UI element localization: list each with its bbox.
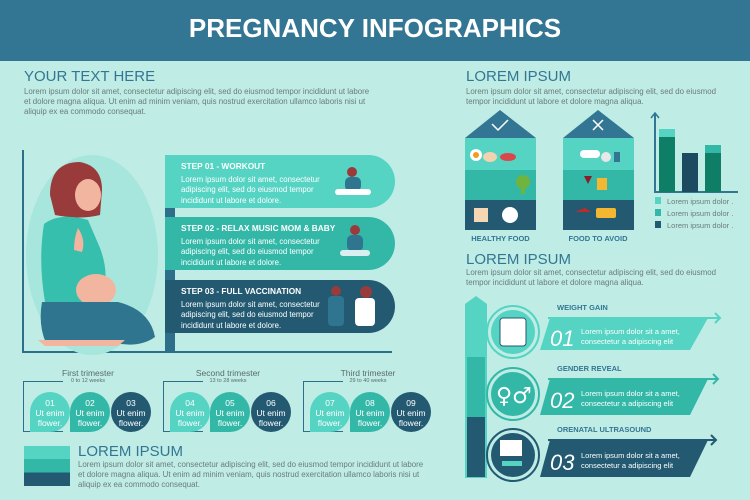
illustration: pregnant woman frame xyxy=(22,150,392,355)
trimester 3: flower. xyxy=(399,418,423,428)
trimester 2: flower. xyxy=(178,418,202,428)
trimester 2: flower. xyxy=(218,418,242,428)
header bar xyxy=(0,0,750,61)
bar chart xyxy=(651,113,738,192)
legend: Lorem ipsum dolor . xyxy=(667,197,733,206)
panel: food houses and chart xyxy=(465,110,738,230)
text block: right top: Lorem ipsum dolor sit amet, consectetur adipiscing elit, sed do eiusmod tempor incididunt ut labore et dolore magna aliqua. xyxy=(466,87,716,106)
trimester 3: Ut enim xyxy=(396,408,426,418)
trimester 3: flower. xyxy=(358,418,382,428)
trimester 3: flower. xyxy=(318,418,342,428)
trimester 1: Ut enim xyxy=(75,408,105,418)
step 2: STEP 02 - RELAX MUSIC MOM & BABY xyxy=(181,223,335,233)
item 03: Lorem ipsum dolor sit a amet, xyxy=(581,451,680,460)
step 1: STEP 01 - WORKOUT xyxy=(181,161,265,171)
icon: yoga xyxy=(335,167,371,195)
step 1: Lorem ipsum dolor sit amet, consectetur adipiscing elit, sed do eiusmod tempor incididunt ut labore et dolore. xyxy=(181,174,320,204)
item 02: Lorem ipsum dolor sit a amet, xyxy=(581,389,680,398)
trimester 3: 08 xyxy=(365,398,375,408)
panel: progress list xyxy=(465,296,722,482)
trimester 2: flower. xyxy=(259,418,283,428)
text: FOOD TO AVOID xyxy=(568,234,628,243)
trimester 1: 03 xyxy=(126,398,136,408)
legend: Lorem ipsum dolor . xyxy=(667,209,733,218)
item 03: 03 xyxy=(550,450,575,475)
step 2 xyxy=(165,217,395,270)
item 01: WEIGHT GAIN xyxy=(557,303,608,312)
house: healthy food xyxy=(465,110,536,230)
trimester 1: 01 xyxy=(45,398,55,408)
trimester 3: Ut enim xyxy=(355,408,385,418)
item 03: ORENATAL ULTRASOUND xyxy=(557,425,652,434)
text block: right second: Lorem ipsum dolor sit amet, consectetur adipiscing elit, sed do eiusmod tempor incididunt ut labore et dolore magna aliqua. xyxy=(466,268,716,287)
icon: vaccination xyxy=(328,286,375,326)
trimester 1: Ut enim xyxy=(35,408,65,418)
labels: food houses: HEALTHY FOOD xyxy=(471,234,530,243)
trimester 3: 07 xyxy=(325,398,335,408)
trimester 2: 04 xyxy=(185,398,195,408)
heading: your text here: YOUR TEXT HERE xyxy=(24,68,155,85)
trimester 1: flower. xyxy=(78,418,102,428)
trimester 2: Ut enim xyxy=(175,408,205,418)
item 03: consectetur a adipiscing elit xyxy=(581,461,674,470)
text block: bottom: Lorem ipsum dolor sit amet, consectetur adipiscing elit, sed do eiusmod tempor incididunt ut labore et dolore magna aliqua. Ut enim ad minim veniam, quis nostrud exercitation ullamco laboris nisi ut aliquip ex ea commodo consequat. xyxy=(78,460,423,489)
item 02: consectetur a adipiscing elit xyxy=(581,399,674,408)
item 01: 01 xyxy=(550,326,574,351)
step 1 xyxy=(165,155,395,208)
item 01 xyxy=(487,303,720,358)
item 03 xyxy=(487,425,716,481)
trimester 2: Ut enim xyxy=(215,408,245,418)
item 02 xyxy=(487,364,718,420)
trimester 3 xyxy=(303,368,431,432)
house: food to avoid xyxy=(563,110,634,230)
step 3: Lorem ipsum dolor sit amet, consectetur adipiscing elit, sed do eiusmod tempor incididunt ut labore et dolore. xyxy=(181,300,320,330)
item 02: 02 xyxy=(550,388,574,413)
title: PREGNANCY INFOGRAPHICS xyxy=(189,13,561,43)
trimester 2: 06 xyxy=(266,398,276,408)
trimester 1: 0 to 12 weeks xyxy=(71,378,105,384)
trimester 3: Ut enim xyxy=(315,408,345,418)
legend xyxy=(655,197,733,230)
heading: right lorem ipsum: LOREM IPSUM xyxy=(466,68,571,85)
item 01: consectetur a adipiscing elit xyxy=(581,337,674,346)
item 01: Lorem ipsum dolor sit a amet, xyxy=(581,327,680,336)
icon: relax xyxy=(340,225,370,256)
trimester 1: flower. xyxy=(119,418,143,428)
trimester 2: 13 to 28 weeks xyxy=(210,378,246,384)
trimester 3: 09 xyxy=(406,398,416,408)
heading: right second lorem ipsum: LOREM IPSUM xyxy=(466,251,571,268)
item 02: GENDER REVEAL xyxy=(557,364,622,373)
trimester 1: Ut enim xyxy=(116,408,146,418)
trimester 3: Third trimester xyxy=(341,368,395,378)
trimester 1: 02 xyxy=(85,398,95,408)
item 02: ♀♂ xyxy=(496,384,532,409)
color block icon xyxy=(24,446,70,486)
text block: intro: Lorem ipsum dolor sit amet, consectetur adipiscing elit, sed do eiusmod tempor incididunt ut labore et dolore magna aliqua. Ut enim ad minim veniam, quis nostrud exercitation ullamco laboris nisi ut aliquip ex ea commodo consequat. xyxy=(24,87,369,116)
trimester 1: flower. xyxy=(38,418,62,428)
trimester 2: Second trimester xyxy=(196,368,260,378)
step 2: Lorem ipsum dolor sit amet, consectetur adipiscing elit, sed do eiusmod tempor incididunt ut labore et dolore. xyxy=(181,236,320,266)
step 3: STEP 03 - FULL VACCINATION xyxy=(181,286,301,296)
heading: bottom lorem ipsum: LOREM IPSUM xyxy=(78,443,183,460)
trimester 2: 05 xyxy=(225,398,235,408)
trimester 1: First trimester xyxy=(62,368,114,378)
step 3 xyxy=(165,280,395,333)
legend: Lorem ipsum dolor . xyxy=(667,221,733,230)
trimester 2 xyxy=(163,368,291,432)
trimester 2: Ut enim xyxy=(256,408,286,418)
trimester 3: 29 to 40 weeks xyxy=(350,378,386,384)
trimester 1 xyxy=(23,368,151,432)
vertical progress arrow xyxy=(465,296,487,478)
